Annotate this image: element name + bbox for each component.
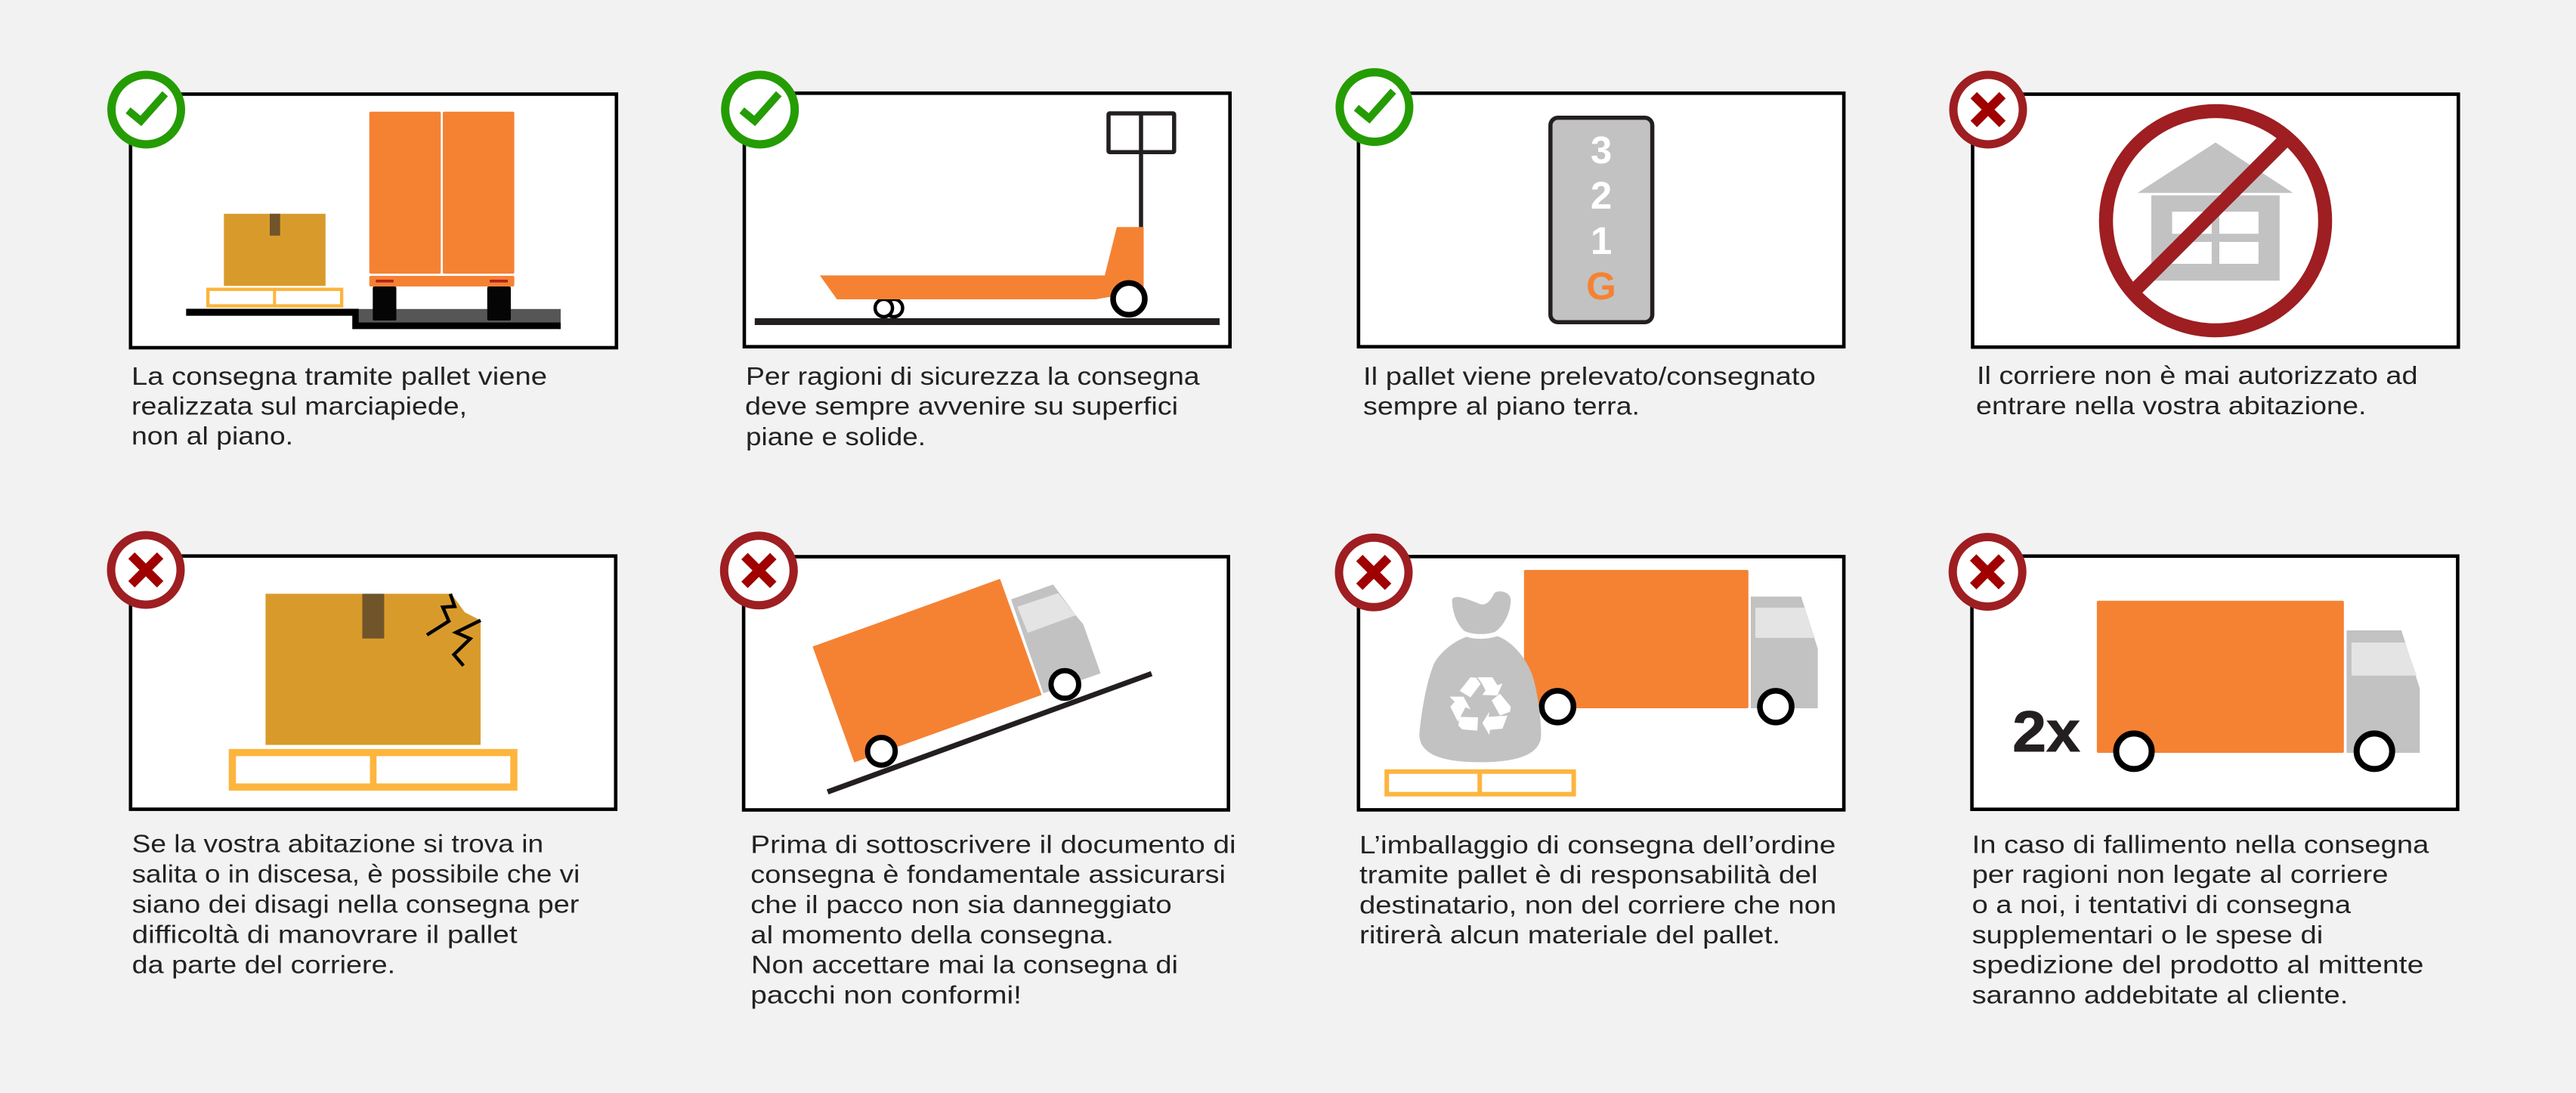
- caption: salita o in discesa, è possibile che vi: [132, 860, 580, 887]
- badge: cross: [111, 535, 181, 605]
- caption: supplementari o le spese di: [1972, 921, 2323, 949]
- caption: o a noi, i tentativi di consegna: [1972, 890, 2352, 918]
- caption: non al piano.: [131, 422, 293, 450]
- caption: tramite pallet è di responsabilità del: [1359, 860, 1818, 888]
- caption: L’imballaggio di consegna dell’ordine: [1359, 831, 1835, 859]
- caption: sempre al piano terra.: [1363, 392, 1640, 420]
- caption: spedizione del prodotto al mittente: [1972, 951, 2423, 979]
- panel: divieto di ingresso: [1953, 75, 2458, 420]
- panel: pacco danneggiato: [111, 535, 616, 978]
- caption: [1972, 830, 2429, 1009]
- caption: La consegna tramite pallet viene: [131, 362, 547, 390]
- icon: truck: [2097, 601, 2420, 769]
- caption: Il pallet viene prelevato/consegnato: [1363, 362, 1816, 390]
- caption: [1359, 831, 1836, 949]
- badge: cross: [1953, 75, 2023, 144]
- icon: damaged box on pallet: [233, 594, 514, 789]
- caption: Non accettare mai la consegna di: [751, 951, 1178, 979]
- badge: check: [1340, 73, 1409, 142]
- badge: check: [112, 75, 181, 144]
- label: 2x: 2x: [2012, 700, 2080, 764]
- icon: pallet box: [208, 214, 342, 306]
- icon: recycle symbol: [1449, 677, 1511, 735]
- panel: superfici piane e solide: [725, 75, 1230, 451]
- caption: saranno addebitate al cliente.: [1972, 981, 2348, 1009]
- caption: [750, 830, 1236, 1009]
- caption: da parte del corriere.: [132, 951, 395, 978]
- icon: truck on slope: [812, 579, 1152, 792]
- illustration frame: [131, 556, 616, 810]
- caption: In caso di fallimento nella consegna: [1972, 830, 2429, 859]
- illustration frame: [1359, 93, 1844, 347]
- icon: forbidden house: [2106, 111, 2325, 330]
- icon: truck rear: [370, 112, 515, 320]
- caption: Se la vostra abitazione si trova in: [132, 830, 543, 857]
- illustration frame: [1972, 556, 2457, 810]
- caption: [1363, 362, 1816, 420]
- icon: elevator panel: 3: [1591, 128, 1612, 172]
- illustration frame: [744, 556, 1229, 810]
- badge: cross: [1339, 537, 1409, 607]
- icon: pallet jack: [755, 113, 1220, 325]
- caption: Per ragioni di sicurezza la consegna: [746, 362, 1200, 390]
- illustration frame: [1972, 94, 2458, 347]
- caption: deve sempre avvenire su superfici: [745, 392, 1178, 420]
- caption: [745, 362, 1200, 451]
- caption: pacchi non conformi!: [750, 981, 1022, 1009]
- icon: elevator panel: 1: [1591, 219, 1612, 262]
- panel: imballaggio a carico del destinatario: [1339, 537, 1844, 949]
- caption: difficoltà di manovrare il pallet: [132, 921, 518, 948]
- icon: elevator panel: 2: [1591, 174, 1612, 217]
- caption: per ragioni non legate al corriere: [1972, 860, 2389, 888]
- panel: camion in salita: [724, 536, 1236, 1009]
- illustration frame: [744, 93, 1230, 347]
- illustration frame: [1359, 556, 1844, 810]
- caption: consegna è fondamentale assicurarsi: [750, 860, 1226, 888]
- illustration frame: [131, 94, 617, 348]
- caption: Il corriere non è mai autorizzato ad: [1977, 361, 2418, 389]
- caption: [1976, 361, 2418, 420]
- caption: Prima di sottoscrivere il documento di: [750, 830, 1236, 859]
- caption: siano dei disagi nella consegna per: [132, 890, 579, 918]
- caption: [131, 362, 547, 450]
- icon: recycling bag on pallet: [1387, 591, 1574, 795]
- caption: al momento della consegna.: [750, 921, 1114, 949]
- caption: [132, 830, 580, 978]
- icon: elevator panel: G: [1586, 265, 1616, 308]
- caption: ritirerà alcun materiale del pallet.: [1359, 921, 1780, 949]
- badge: check: [725, 75, 795, 144]
- icon: elevator panel: [1551, 118, 1653, 322]
- panel: piano terra: [1340, 73, 1844, 420]
- caption: piane e solide.: [746, 423, 926, 451]
- caption: entrare nella vostra abitazione.: [1976, 392, 2367, 420]
- panel: consegna sul marciapiede: [112, 75, 617, 450]
- caption: destinatario, non del corriere che non: [1359, 890, 1836, 918]
- caption: realizzata sul marciapiede,: [131, 392, 467, 420]
- badge: cross: [1953, 537, 2022, 606]
- icon: truck: [1524, 570, 1818, 723]
- caption: che il pacco non sia danneggiato: [750, 890, 1172, 918]
- panel: tentativi di consegna: [1953, 537, 2457, 1009]
- sidewalk and road: [186, 308, 561, 329]
- badge: cross: [724, 536, 793, 605]
